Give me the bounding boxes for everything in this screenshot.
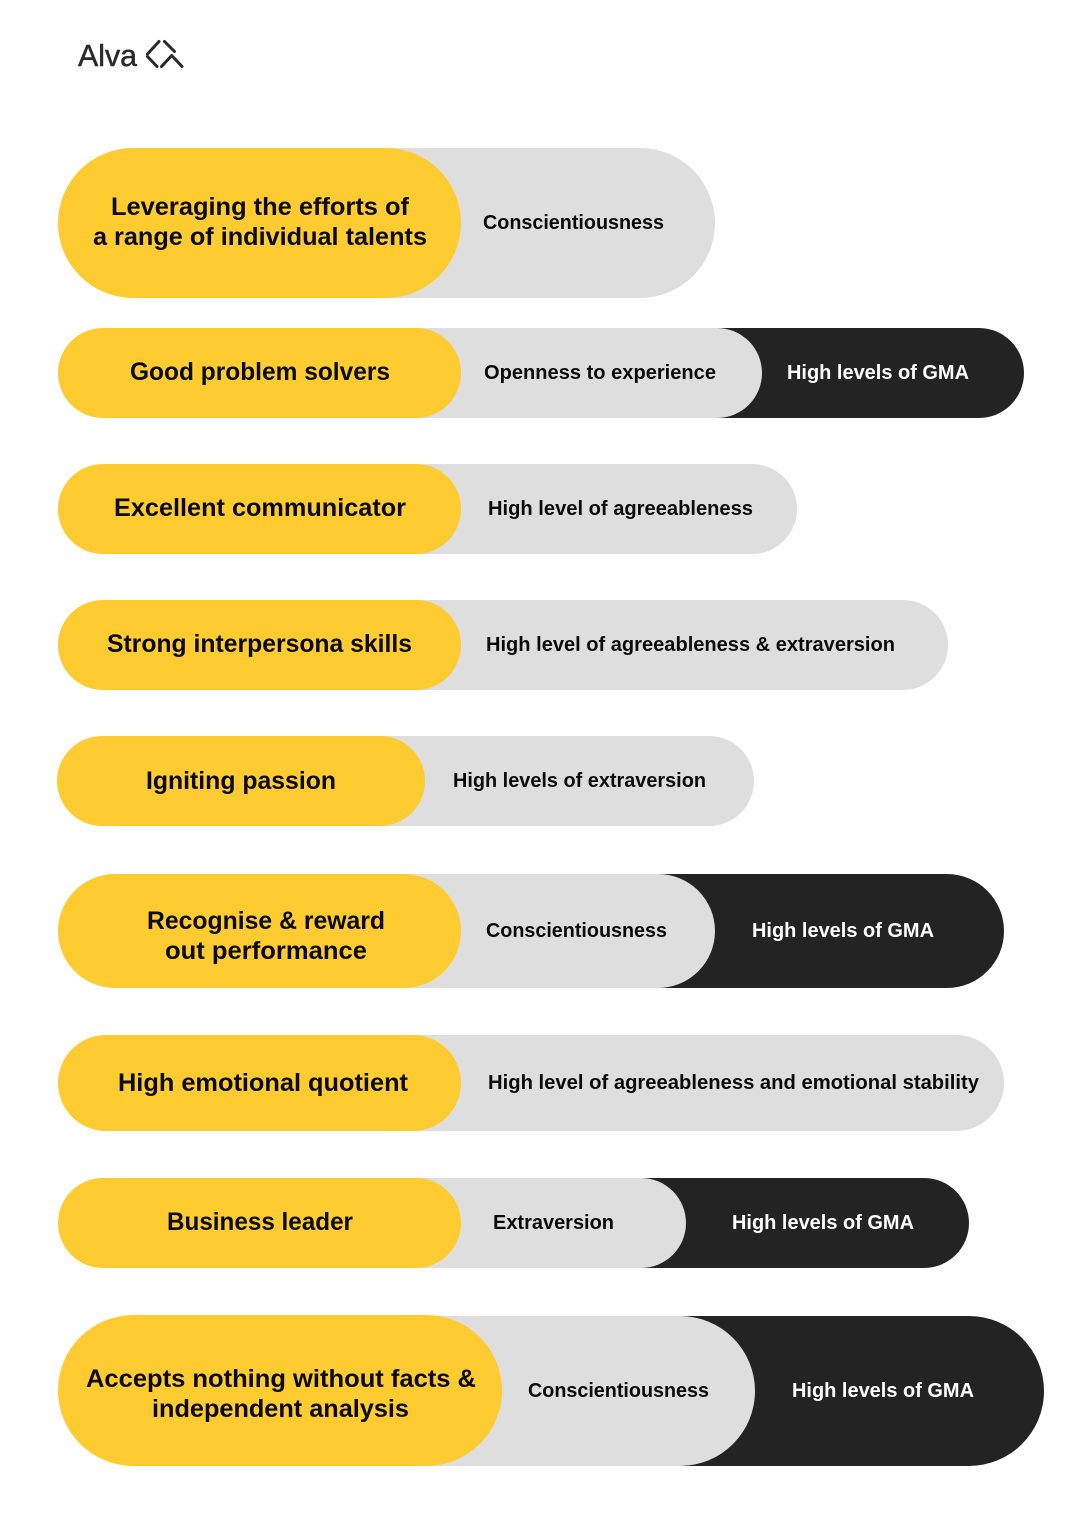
row 4: Strong interpersona skills: High level of agreeableness & extraversion (486, 634, 895, 656)
row 2: Good problem solvers: High levels of GMA (787, 362, 969, 384)
logo: Alva: Alva (78, 38, 138, 73)
row 2: Good problem solvers (58, 328, 1024, 418)
row 1: Leveraging talents (58, 148, 715, 298)
row 8: Business leader (58, 1178, 969, 1268)
row 7: High emotional quotient (58, 1035, 1004, 1131)
row 6: Recognise & reward: High levels of GMA (752, 920, 934, 942)
row 1: Leveraging talents: Conscientiousness (483, 212, 664, 234)
row 5: Igniting passion (57, 736, 754, 826)
row 1: Leveraging talents: Leveraging the efforts of (111, 193, 410, 221)
row 3: Excellent communicator: High level of agreeableness (488, 498, 753, 520)
row 8: Business leader: High levels of GMA (732, 1212, 914, 1234)
row 9: Accepts nothing without facts: High levels of GMA (792, 1380, 974, 1402)
row 6: Recognise & reward: Recognise & reward (147, 907, 385, 935)
row 4: Strong interpersona skills (58, 600, 948, 690)
row 7: High emotional quotient: High emotional quotient (118, 1069, 409, 1097)
row 2: Good problem solvers: Openness to experience (484, 362, 716, 384)
row 3: Excellent communicator: Excellent communicator (114, 494, 406, 522)
row 1: Leveraging talents: a range of individual talents (93, 223, 427, 251)
row 6: Recognise & reward (58, 874, 1004, 988)
row 8: Business leader: Extraversion (493, 1212, 614, 1234)
row 4: Strong interpersona skills: Strong interpersona skills (107, 630, 412, 658)
row 7: High emotional quotient: High level of agreeableness and emotional stability (488, 1072, 980, 1094)
row 5: Igniting passion: Igniting passion (146, 767, 336, 795)
row 5: Igniting passion: High levels of extraversion (453, 770, 706, 792)
row 9: Accepts nothing without facts: independent analysis (152, 1395, 409, 1423)
row 6: Recognise & reward: Conscientiousness (486, 920, 667, 942)
row 9: Accepts nothing without facts: Accepts nothing without facts & (86, 1365, 476, 1393)
row 3: Excellent communicator (58, 464, 797, 554)
row 2: Good problem solvers: Good problem solvers (130, 358, 390, 386)
row 8: Business leader: Business leader (167, 1208, 353, 1236)
logo: Alva (78, 38, 182, 73)
row 9: Accepts nothing without facts: Conscientiousness (528, 1380, 709, 1402)
row 9: Accepts nothing without facts (58, 1315, 1044, 1466)
row 6: Recognise & reward: out performance (165, 937, 367, 965)
